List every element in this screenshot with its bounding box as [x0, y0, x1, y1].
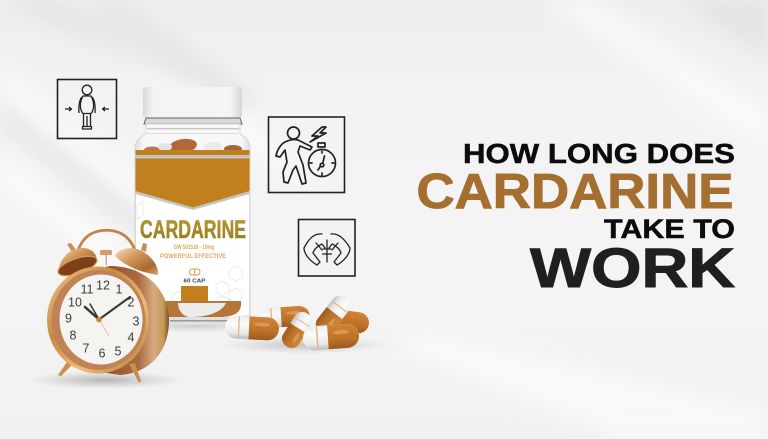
icon: runner with stopwatch: [268, 117, 344, 192]
label: count: 60 CAP: [184, 278, 206, 284]
icon: muscular torso: [298, 220, 355, 276]
capsule tilted centre: [279, 309, 315, 351]
capsules inside jar bottom: [165, 301, 241, 317]
icon: body with arrows pointing inward: [58, 80, 116, 138]
clock numerals: 7: [83, 342, 90, 356]
bottle neck: [144, 118, 242, 124]
clock numerals: 3: [133, 314, 140, 328]
bottle base: [140, 317, 248, 325]
capsule front left: [224, 315, 280, 341]
bottle lid: [143, 87, 242, 118]
bottle body: [135, 124, 250, 324]
clock numerals: 6: [99, 346, 106, 360]
label: dose: GW 501516 - 10mg: [174, 244, 215, 251]
clock numerals: 11: [81, 282, 94, 296]
clock numerals: 9: [65, 312, 72, 326]
clock body side: [100, 266, 169, 375]
clock legs: [58, 362, 72, 376]
clock numerals: 5: [115, 344, 122, 358]
capsule front right: [302, 323, 360, 351]
title line: work: WORK: [530, 237, 735, 299]
clock numerals: 10: [68, 296, 82, 310]
bottle label: [136, 151, 249, 315]
capsules shadow: [220, 336, 390, 354]
clock left bell: [56, 243, 99, 280]
clock shadow: [27, 371, 183, 389]
capsules inside jar top: [144, 137, 242, 155]
label: product name: CARDARINE: [140, 216, 246, 244]
capsules group: [220, 292, 390, 354]
label orange band: [136, 150, 250, 208]
clock bezel: [47, 266, 149, 374]
bottle: [130, 87, 260, 333]
label: orange block: [181, 286, 208, 301]
clock hammer: [100, 250, 112, 265]
clock numerals: [65, 278, 140, 360]
title: [416, 138, 735, 299]
capsule back right orange: [336, 309, 370, 335]
clock face: [60, 274, 142, 364]
clock handle: [78, 230, 135, 250]
label: capsule glyph: [190, 269, 200, 275]
capsule back centre: [258, 305, 310, 329]
clock numerals: 12: [96, 278, 110, 292]
bottle shadow: [130, 317, 260, 333]
clock hands: [85, 297, 130, 336]
clock numerals: 4: [128, 330, 135, 344]
title line: cardarine: CARDARINE: [416, 164, 734, 219]
hexagon pattern: [137, 201, 242, 310]
clock numerals: 1: [116, 282, 123, 296]
title line: take to: TAKE TO: [604, 214, 735, 244]
capsule upright: [312, 292, 354, 338]
label: tagline: POWERFUL EFFECTIVE: [160, 253, 226, 260]
clock numerals: 8: [70, 328, 77, 342]
title line: how long does: HOW LONG DOES: [463, 138, 735, 169]
clock numerals: 2: [128, 296, 135, 310]
alarm clock: [27, 230, 183, 389]
clock right bell: [115, 243, 158, 275]
